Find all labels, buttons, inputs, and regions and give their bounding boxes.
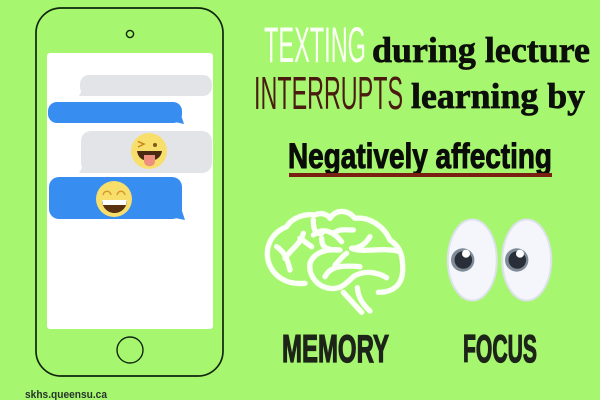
title line 1: TEXTING [264, 17, 366, 73]
phone body [36, 8, 223, 376]
icon: brain [267, 211, 403, 312]
icon: laughing emoji [96, 181, 132, 217]
home button [117, 337, 143, 363]
label: memory: MEMORY [282, 328, 389, 371]
title line 1 [264, 17, 590, 73]
label: focus: FOCUS [463, 328, 537, 371]
icon: tongue-out emoji [131, 133, 167, 169]
blue message bubble 1 [48, 102, 184, 124]
right eye [502, 220, 551, 300]
subtitle underline [289, 173, 552, 177]
title line 2: INTERRUPTS [254, 67, 403, 119]
camera [126, 30, 134, 38]
title line 2: learning by [411, 76, 585, 116]
left eye [448, 220, 497, 300]
grey message bubble 1 [79, 75, 212, 96]
phone illustration [36, 8, 223, 376]
blue message bubble 2 [49, 177, 185, 220]
icon: eyes [448, 220, 551, 300]
phone screen [47, 53, 213, 329]
grey message bubble 2 [79, 131, 212, 173]
title line 1: during lecture [372, 30, 590, 70]
